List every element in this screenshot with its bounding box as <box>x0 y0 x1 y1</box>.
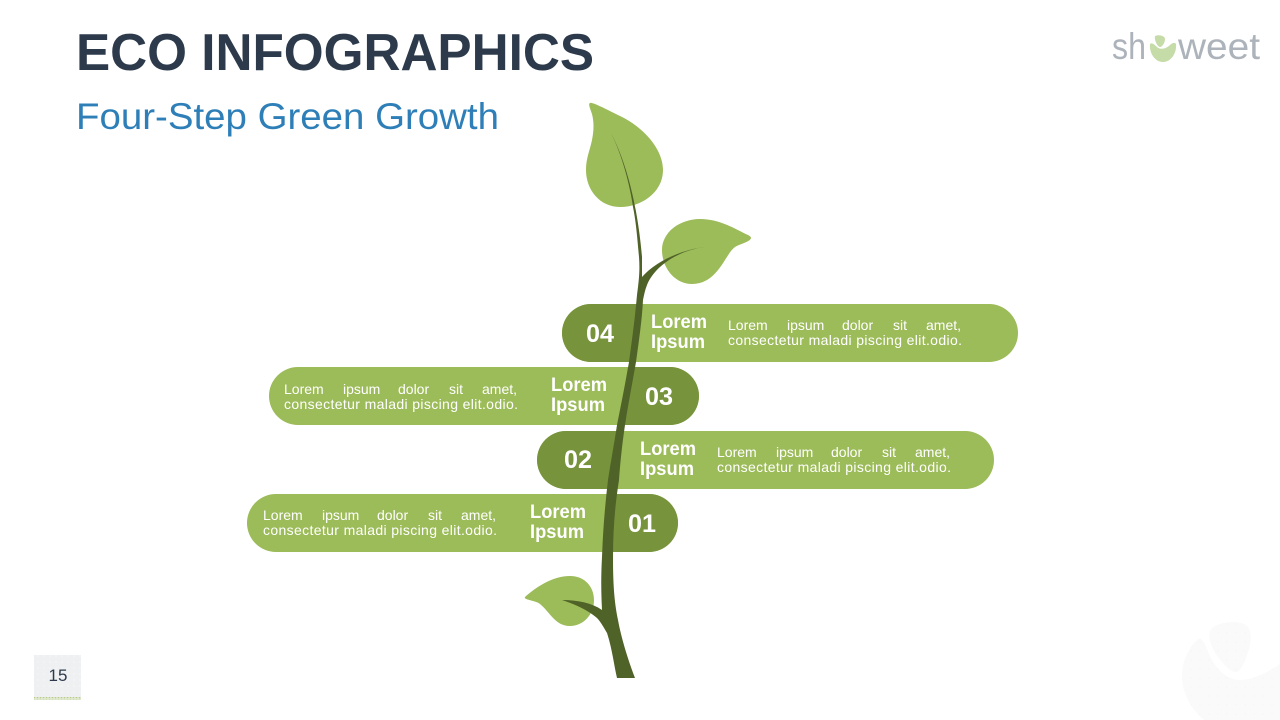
step 01 bar: Lorem <box>530 502 586 523</box>
plant stem <box>562 133 705 678</box>
step 01 bar: amet, <box>461 507 496 523</box>
step 02 bar: 02 <box>564 446 592 474</box>
page number <box>34 655 81 700</box>
step 02 bar: Ipsum <box>640 459 694 480</box>
step 01 bar: Ipsum <box>530 522 584 543</box>
step 03 bar: 03 <box>645 383 673 411</box>
step 02 bar: Lorem <box>717 444 757 460</box>
step 02 bar: amet, <box>915 444 950 460</box>
step 04 bar <box>562 304 1018 362</box>
step 03 bar <box>269 367 699 425</box>
step 03 bar: Lorem <box>284 381 324 397</box>
step 01 bar: dolor <box>377 507 408 523</box>
step 04 bar: ipsum <box>787 317 824 333</box>
step 02 bar: sit <box>882 444 896 460</box>
step 04 bar: Lorem <box>728 317 768 333</box>
page number: 15 <box>49 666 67 685</box>
step 04 bar: Ipsum <box>651 332 705 353</box>
step 01 bar: Lorem <box>263 507 303 523</box>
step 03 bar: Ipsum <box>551 395 605 416</box>
step 02 bar <box>537 431 994 489</box>
step 02 bar: ipsum <box>776 444 813 460</box>
step 03 bar: amet, <box>482 381 517 397</box>
step 01 bar: consectetur maladi piscing elit.odio. <box>263 522 497 538</box>
step 02 bar: consectetur maladi piscing elit.odio. <box>717 459 951 475</box>
step 01 bar: ipsum <box>322 507 359 523</box>
step 04 bar: sit <box>893 317 907 333</box>
step 03 bar: dolor <box>398 381 429 397</box>
step 04 bar: consectetur maladi piscing elit.odio. <box>728 332 962 348</box>
step 04 bar: 04 <box>586 320 614 348</box>
icon: top leaf <box>586 103 663 207</box>
step 04 bar: Lorem <box>651 312 707 333</box>
subtitle: Four-Step Green Growth <box>76 96 499 137</box>
icon: lower leaf <box>525 576 594 626</box>
watermark emblem <box>1182 622 1280 720</box>
step 02 bar: Lorem <box>640 439 696 460</box>
step 03 bar: sit <box>449 381 463 397</box>
step 02 bar: dolor <box>831 444 862 460</box>
step 04 bar: dolor <box>842 317 873 333</box>
logo: showeet: sh <box>1112 26 1146 67</box>
logo: showeet <box>1112 26 1261 67</box>
step 04 bar: amet, <box>926 317 961 333</box>
title: ECO INFOGRAPHICS <box>76 24 594 82</box>
step 01 bar <box>247 494 678 552</box>
step 03 bar: Lorem <box>551 375 607 396</box>
step 01 bar: 01 <box>628 510 656 538</box>
step 01 bar: sit <box>428 507 442 523</box>
step 03 bar: consectetur maladi piscing elit.odio. <box>284 396 518 412</box>
logo: showeet: weet <box>1177 26 1261 67</box>
step 03 bar: ipsum <box>343 381 380 397</box>
icon: right leaf <box>662 219 751 284</box>
